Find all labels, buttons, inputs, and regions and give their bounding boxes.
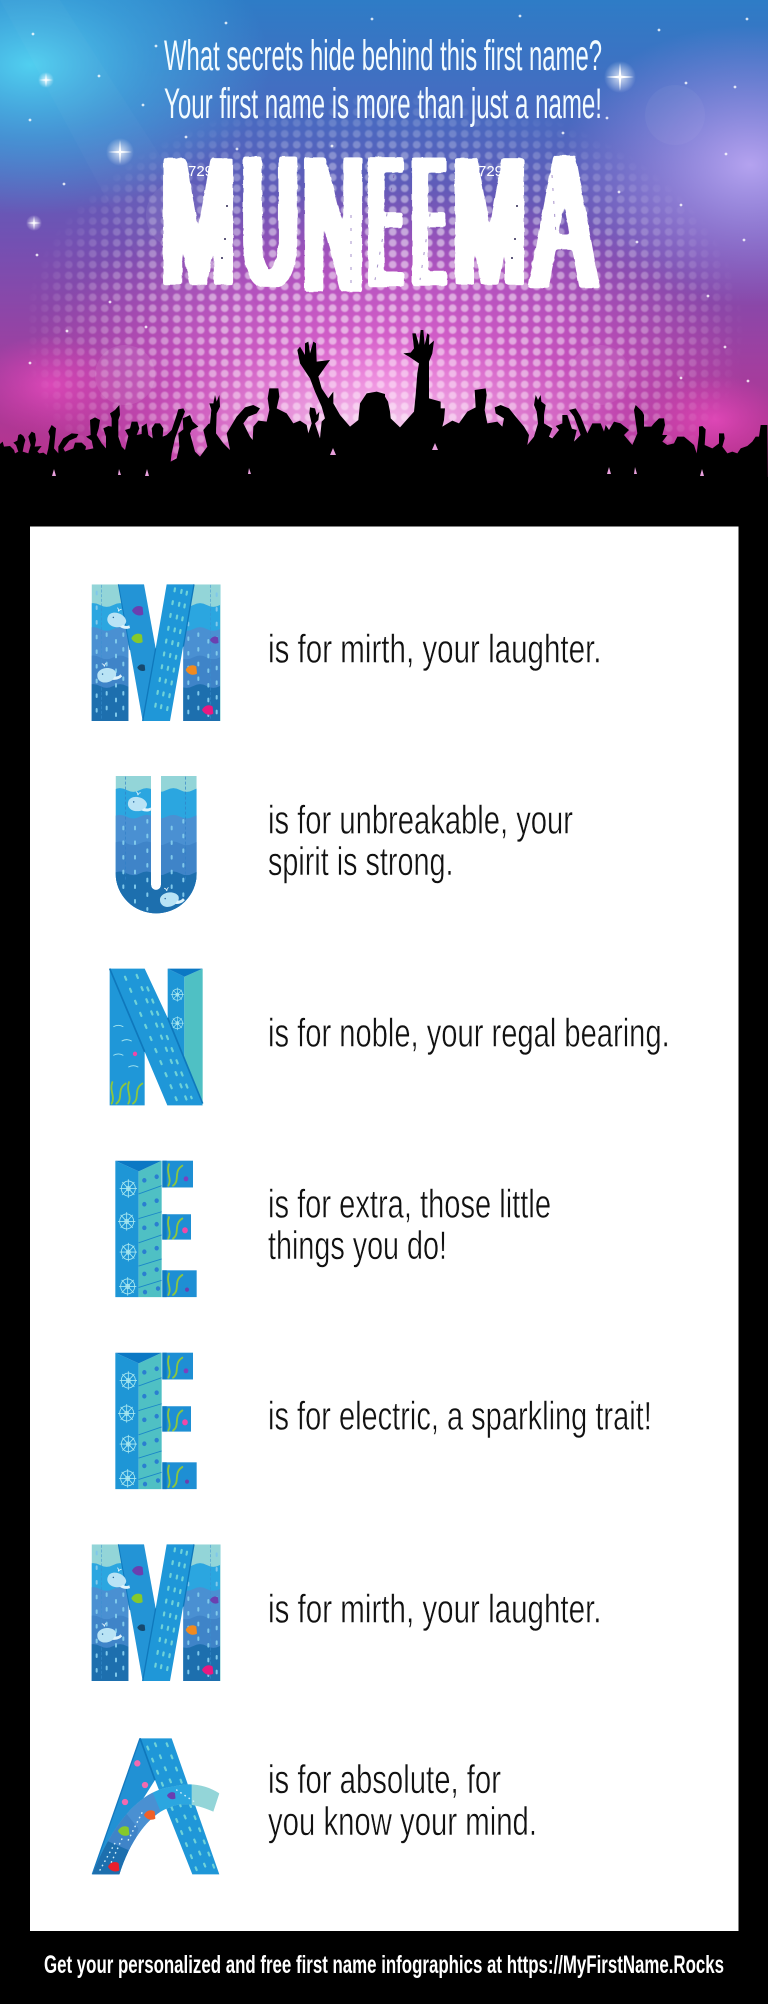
row 2: U is for unbreakable xyxy=(116,776,572,914)
stage background gradient xyxy=(0,0,768,477)
white content panel xyxy=(30,526,738,1931)
hero banner xyxy=(0,0,768,477)
name title: MUNEEMA: 729 xyxy=(188,163,213,180)
row 2 text: is for unbreakable, your xyxy=(268,798,573,842)
row 1 text: is for mirth, your laughter. xyxy=(268,627,602,671)
row 4: E is for extra xyxy=(115,1161,551,1297)
row 2 text: spirit is strong. xyxy=(268,840,454,884)
name title: MUNEEMA: 729 xyxy=(478,163,503,180)
row 4 text: is for extra, those little xyxy=(268,1182,551,1226)
headline text xyxy=(164,32,602,128)
letter icon: A xyxy=(90,1738,223,1880)
name title: MUNEEMA: M xyxy=(162,121,234,324)
row 4 text xyxy=(268,1182,551,1268)
row 2 text xyxy=(268,798,573,884)
name title: MUNEEMA: N xyxy=(304,115,363,333)
row 5: E is for electric xyxy=(115,1353,652,1489)
letter icon: E xyxy=(115,1161,197,1297)
row 1: M is for mirth xyxy=(87,583,602,853)
name title: MUNEEMA: U xyxy=(243,118,297,326)
crowd silhouette xyxy=(0,330,768,530)
name title: MUNEEMA: A xyxy=(534,115,594,328)
sparkling stars xyxy=(26,16,748,381)
row 4 text: things you do! xyxy=(268,1224,447,1268)
letter icon: M xyxy=(87,583,223,853)
name title: MUNEEMA: M xyxy=(454,120,525,324)
row 6 text: is for mirth, your laughter. xyxy=(268,1587,602,1631)
row 6: M is for mirth xyxy=(87,1543,602,1813)
name title: MUNEEMA xyxy=(162,115,594,333)
row 7: A is for absolute xyxy=(90,1738,537,1880)
row 7 text: is for absolute, for xyxy=(268,1758,501,1802)
row 3: N is for noble xyxy=(110,969,670,1105)
letter icon: E xyxy=(115,1353,197,1489)
letter icon: N xyxy=(110,969,203,1105)
row 7 text xyxy=(268,1758,537,1844)
row 7 text: you know your mind. xyxy=(268,1800,537,1844)
letter icon: U xyxy=(116,776,197,914)
name title: MUNEEMA: E xyxy=(370,117,400,326)
letter icon: M xyxy=(87,1543,223,1813)
name title: MUNEEMA: E xyxy=(414,119,443,325)
